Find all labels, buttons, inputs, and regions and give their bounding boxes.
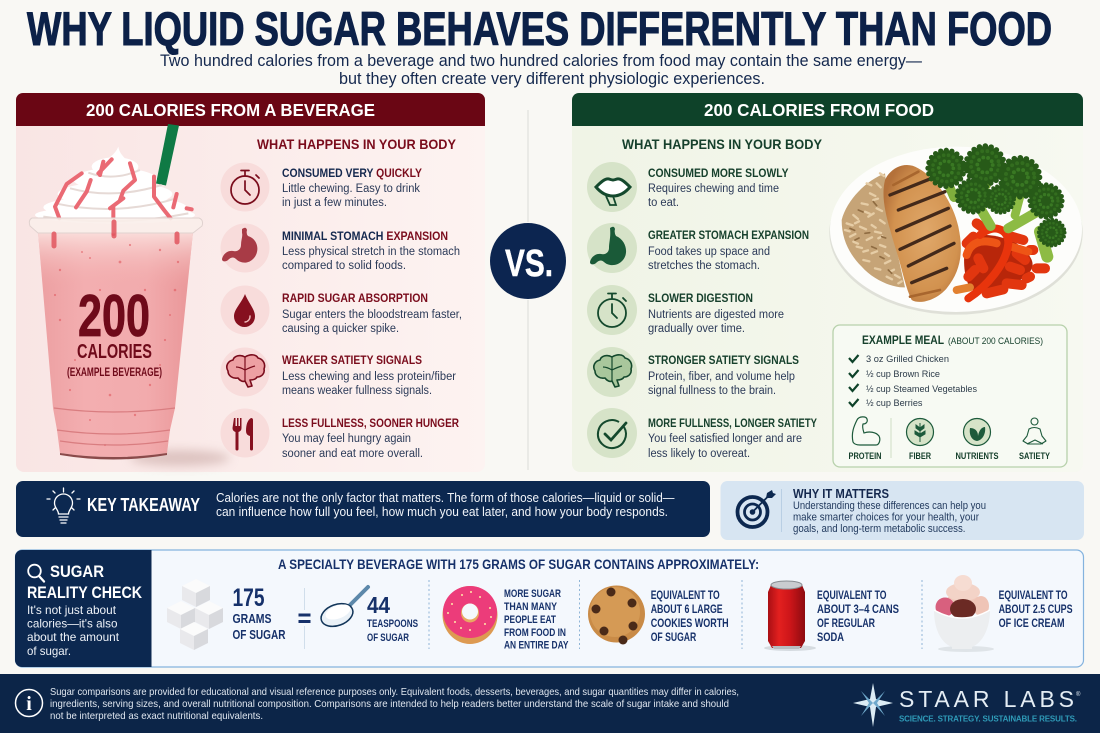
logo: staar labs: SCIENCE. STRATEGY. SUSTAINABLE RESULTS. [899,714,1077,724]
key takeaway banner: KEY TAKEAWAY [87,495,200,515]
item: greater stomach expansion: GREATER STOMACH EXPANSION [648,230,809,242]
item: weaker satiety signals: WEAKER SATIETY SIGNALS [282,355,422,367]
item: ice cream: OF ICE CREAM [999,618,1065,630]
item: stronger satiety signals [587,347,799,397]
item: cookie: ABOUT 6 LARGE [651,604,723,616]
icon: info: i [26,693,32,715]
item: weaker satiety signals: means weaker fullness signals. [282,385,432,397]
item: more fullness, longer satiety: MORE FULLNESS, LONGER SATIETY [648,418,817,430]
item: greater stomach expansion: Food takes up space and [648,246,770,258]
footer [0,674,1100,733]
stat: 44 teaspoons [367,592,418,644]
item: weaker satiety signals: Less chewing and less protein/fiber [282,371,456,383]
food subheading: WHAT HAPPENS IN YOUR BODY [622,136,823,152]
stat: 175 grams of sugar [232,584,286,642]
icon: spoon of sugar [318,587,368,631]
item: stronger satiety signals: Protein, fiber, and volume help [648,371,795,383]
item: soda can: EQUIVALENT TO [817,590,887,602]
icon: target [738,490,776,527]
brown rice [842,173,905,287]
icon: info [16,690,42,716]
item: ice cream: ABOUT 2.5 CUPS [999,604,1073,616]
item: donut [442,586,569,652]
item: more fullness, longer satiety: less likely to overeat. [648,448,750,460]
beverage subheading: WHAT HAPPENS IN YOUR BODY [257,136,457,152]
sugar reality check sidebar: of sugar. [27,644,71,658]
cup label: 200 calories: (EXAMPLE BEVERAGE) [67,367,162,379]
item: consumed very quickly: in just a few minutes. [282,197,387,209]
example meal box [833,325,1067,467]
icon: fiber [906,418,934,461]
item: consumed more slowly: CONSUMED MORE SLOWLY [648,168,789,180]
item: donut: THAN MANY [504,601,558,613]
item: consumed more slowly [587,162,789,212]
stat: 175 grams of sugar: 175 [232,584,265,612]
grilled chicken [883,165,961,302]
icon: fiber: FIBER [909,451,931,461]
item: stronger satiety signals: STRONGER SATIETY SIGNALS [648,355,799,367]
bell peppers [957,223,1045,298]
sugar reality check sidebar: REALITY CHECK [27,583,143,602]
item: cookie: COOKIES WORTH [651,618,729,630]
item: consumed more slowly: to eat. [648,197,679,209]
item: soda can: SODA [817,632,844,644]
food header: 200 CALORIES FROM FOOD [704,100,934,120]
panel: beverage [16,93,485,472]
disclaimer [50,686,739,722]
cup label: 200 calories: CALORIES [77,340,152,363]
item: soda can: OF REGULAR [817,618,876,630]
logo: staar labs [853,683,1081,727]
example meal box: (ABOUT 200 CALORIES) [948,336,1043,347]
item: less fullness, sooner hunger: LESS FULLNESS, SOONER HUNGER [282,418,460,430]
item: greater stomach expansion: stretches the stomach. [648,260,760,272]
why it matters panel: Understanding these differences can help you [793,500,986,512]
item: minimal stomach expansion [220,224,460,272]
item: ice cream [934,575,1073,652]
item: rapid sugar absorption: Sugar enters the bloodstream faster, [282,309,462,321]
item: slower digestion: Nutrients are digested more [648,309,784,321]
sugar reality check panel [15,550,1084,667]
vs divider: VS. [505,243,553,285]
sugar reality check sidebar: calories—it's also [27,616,118,630]
stat: 44 teaspoons: 44 [367,592,390,618]
item: donut: FROM FOOD IN [504,627,566,639]
icon: sugar cubes [167,579,223,650]
item: consumed very quickly [220,162,422,212]
key takeaway banner: can influence how full you feel, how much you eat later, and how your body responds. [216,504,668,519]
meal checklist: ½ cup Berries [866,398,923,409]
item: more fullness, longer satiety: You feel satisfied longer and are [648,433,802,445]
item: donut: MORE SUGAR [504,588,561,600]
why it matters panel [720,481,1084,540]
item: donut: PEOPLE EAT [504,614,556,626]
icon: nutrients: NUTRIENTS [956,451,998,461]
item: consumed more slowly: Requires chewing and time [648,183,779,195]
why it matters panel: goals, and long-term metabolic success. [793,523,966,535]
meal checklist: 3 oz Grilled Chicken [866,354,949,365]
key takeaway banner: Calories are not the only factor that matters. The form of those calories—liquid or solid— [216,490,674,505]
whipped cream [35,147,195,234]
item: slower digestion [587,285,784,335]
logo: staar labs: STAAR LABS [899,686,1074,712]
item: weaker satiety signals [220,348,456,397]
subtitle: but they often create very different physiologic experiences. [339,70,765,88]
sugar reality check sidebar [15,550,152,667]
item: minimal stomach expansion: Less physical stretch in the stomach [282,246,460,258]
item: soda can: ABOUT 3–4 CANS [817,604,899,616]
disclaimer: Sugar comparisons are provided for educational and visual reference purposes only. Equivalent foods, desserts, beverages, and sugar quantities may differ in calories, [50,686,739,698]
stat: 175 grams of sugar: OF SUGAR [232,628,286,642]
beverage header [16,93,485,126]
item: ice cream: EQUIVALENT TO [999,590,1068,602]
key takeaway banner [16,481,710,537]
meal checklist: ½ cup Brown Rice [866,369,940,380]
why it matters panel: WHY IT MATTERS [793,487,889,501]
sugar reality check sidebar: about the amount [27,630,120,644]
item: donut: AN ENTIRE DAY [504,640,569,652]
item: cookie: EQUIVALENT TO [651,590,720,602]
item: cookie [588,586,729,644]
beverage cup illustration [29,124,230,466]
item: rapid sugar absorption: RAPID SUGAR ABSORPTION [282,293,428,305]
item: less fullness, sooner hunger [220,408,460,460]
sugar reality check sidebar: SUGAR [50,562,104,581]
item: stronger satiety signals: signal fullness to the brain. [648,385,776,397]
item: less fullness, sooner hunger: You may feel hungry again [282,433,411,445]
icon: protein: PROTEIN [848,451,882,461]
meal checklist: ½ cup Steamed Vegetables [866,384,977,395]
item: slower digestion: gradually over time. [648,323,745,335]
icon: protein [848,417,882,461]
sugar reality check sidebar: It's not just about [27,603,117,617]
plate of food illustration [829,146,1083,315]
subtitle [160,52,922,88]
cup label: 200 calories [67,283,162,379]
disclaimer: not be interpreted as exact nutritional equivalents. [50,710,263,722]
vs divider [490,110,566,470]
stat: 44 teaspoons: OF SUGAR [367,632,409,644]
item: greater stomach expansion [587,223,809,273]
item: cookie: OF SUGAR [651,632,697,644]
icon: nutrients [956,418,998,461]
beverage header: 200 CALORIES FROM A BEVERAGE [86,100,375,120]
item: rapid sugar absorption: causing a quicker spike. [282,323,399,335]
item: consumed very quickly: CONSUMED VERY QUICKLY [282,168,422,180]
broccoli [928,146,1065,257]
item: soda can [764,581,899,651]
lid [29,218,203,233]
sugar panel heading: A SPECIALTY BEVERAGE WITH 175 GRAMS OF SUGAR CONTAINS APPROXIMATELY: [278,556,759,572]
why it matters panel: make smarter choices for your health, your [793,512,979,524]
panel: food [572,93,1083,472]
stat: 175 grams of sugar: GRAMS [232,612,272,626]
cup label: 200 calories: 200 [78,283,150,349]
icon: satiety: SATIETY [1019,451,1050,461]
disclaimer: ingredients, serving sizes, and overall nutritional composition. Comparisons are intended to help readers better understand the scale of sugar intake and should [50,698,729,710]
equals sign [298,614,310,623]
item: minimal stomach expansion: MINIMAL STOMACH EXPANSION [282,231,448,243]
stat: 44 teaspoons: TEASPOONS [367,618,418,630]
item: consumed very quickly: Little chewing. Easy to drink [282,183,420,195]
item: minimal stomach expansion: compared to solid foods. [282,260,406,272]
item: more fullness, longer satiety [587,408,817,460]
food header [572,93,1083,126]
item: less fullness, sooner hunger: sooner and eat more overall. [282,448,423,460]
logo: staar labs: ® [1076,691,1081,698]
icon: light bulb [47,488,80,523]
example meal box: EXAMPLE MEAL [862,333,944,347]
icon: satiety [1019,418,1050,461]
item: rapid sugar absorption [220,286,462,335]
item: slower digestion: SLOWER DIGESTION [648,293,753,305]
meal checklist [849,354,977,409]
subtitle: Two hundred calories from a beverage and two hundred calories from food may contain the same energy— [160,52,922,70]
